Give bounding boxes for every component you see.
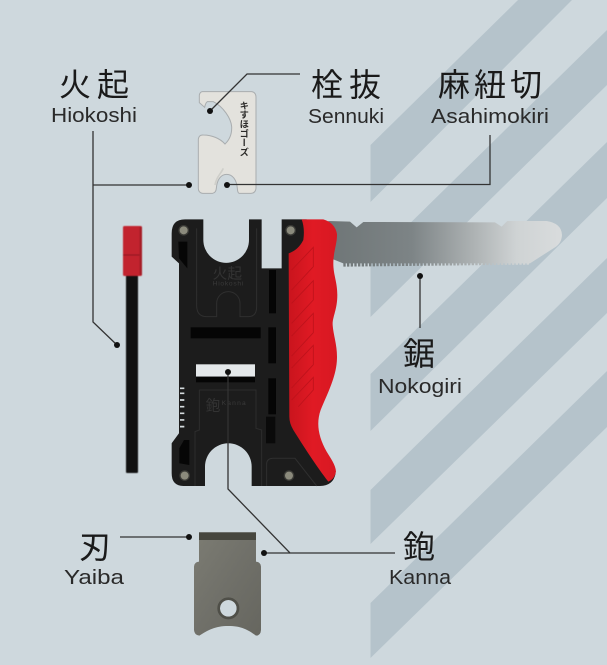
moulded recess lines xyxy=(197,228,257,317)
leader line: Asahimokiri xyxy=(224,135,490,188)
embossed labels: 火起 xyxy=(213,265,242,282)
slots xyxy=(191,327,261,338)
leader line: Hiokoshi xyxy=(93,131,192,348)
part: multitool body: Hiokoshi xyxy=(213,281,244,288)
part: bottle opener plate xyxy=(198,92,256,193)
red handle xyxy=(289,219,337,482)
part: multitool body xyxy=(172,219,337,486)
leader line: Yaiba xyxy=(120,534,192,540)
label: Hiokoshi: 火起 xyxy=(59,67,135,103)
label: Asahimokiri xyxy=(431,67,549,128)
label: Nokogiri: Nokogiri xyxy=(378,375,462,398)
handle ribs xyxy=(292,247,313,407)
label: Nokogiri xyxy=(378,336,462,398)
label: Sennuki: Sennuki xyxy=(308,105,384,128)
label: Nokogiri: 鋸 xyxy=(403,336,435,372)
leader line: Kanna xyxy=(225,369,395,556)
part: fire rod xyxy=(123,226,142,473)
label: Kanna xyxy=(389,529,452,589)
leader line: Nokogiri xyxy=(417,273,423,328)
label: Yaiba xyxy=(64,529,125,589)
grip notches xyxy=(180,388,184,427)
diagonal stripes xyxy=(370,0,607,658)
label: Hiokoshi xyxy=(51,67,137,127)
label: Asahimokiri: 麻紐切 xyxy=(438,67,546,103)
engraved mark on plate: キすほゴーズ xyxy=(238,101,249,157)
label: Yaiba: 刃 xyxy=(79,529,111,565)
label: Yaiba: Yaiba xyxy=(64,566,125,589)
label: Sennuki: 栓抜 xyxy=(311,67,387,103)
label: Hiokoshi: Hiokoshi xyxy=(51,104,137,127)
leader line: Sennuki xyxy=(207,74,300,114)
label: Asahimokiri: Asahimokiri xyxy=(431,105,549,128)
part: multitool body: Kanna xyxy=(222,400,246,407)
label: Sennuki xyxy=(308,67,387,128)
part: plane blade xyxy=(194,532,261,636)
label: Kanna: 鉋 xyxy=(403,529,435,565)
part: saw blade xyxy=(328,221,562,264)
screws xyxy=(179,226,295,480)
part: multitool body: 鉋 xyxy=(206,398,221,415)
label: Kanna: Kanna xyxy=(389,566,452,589)
